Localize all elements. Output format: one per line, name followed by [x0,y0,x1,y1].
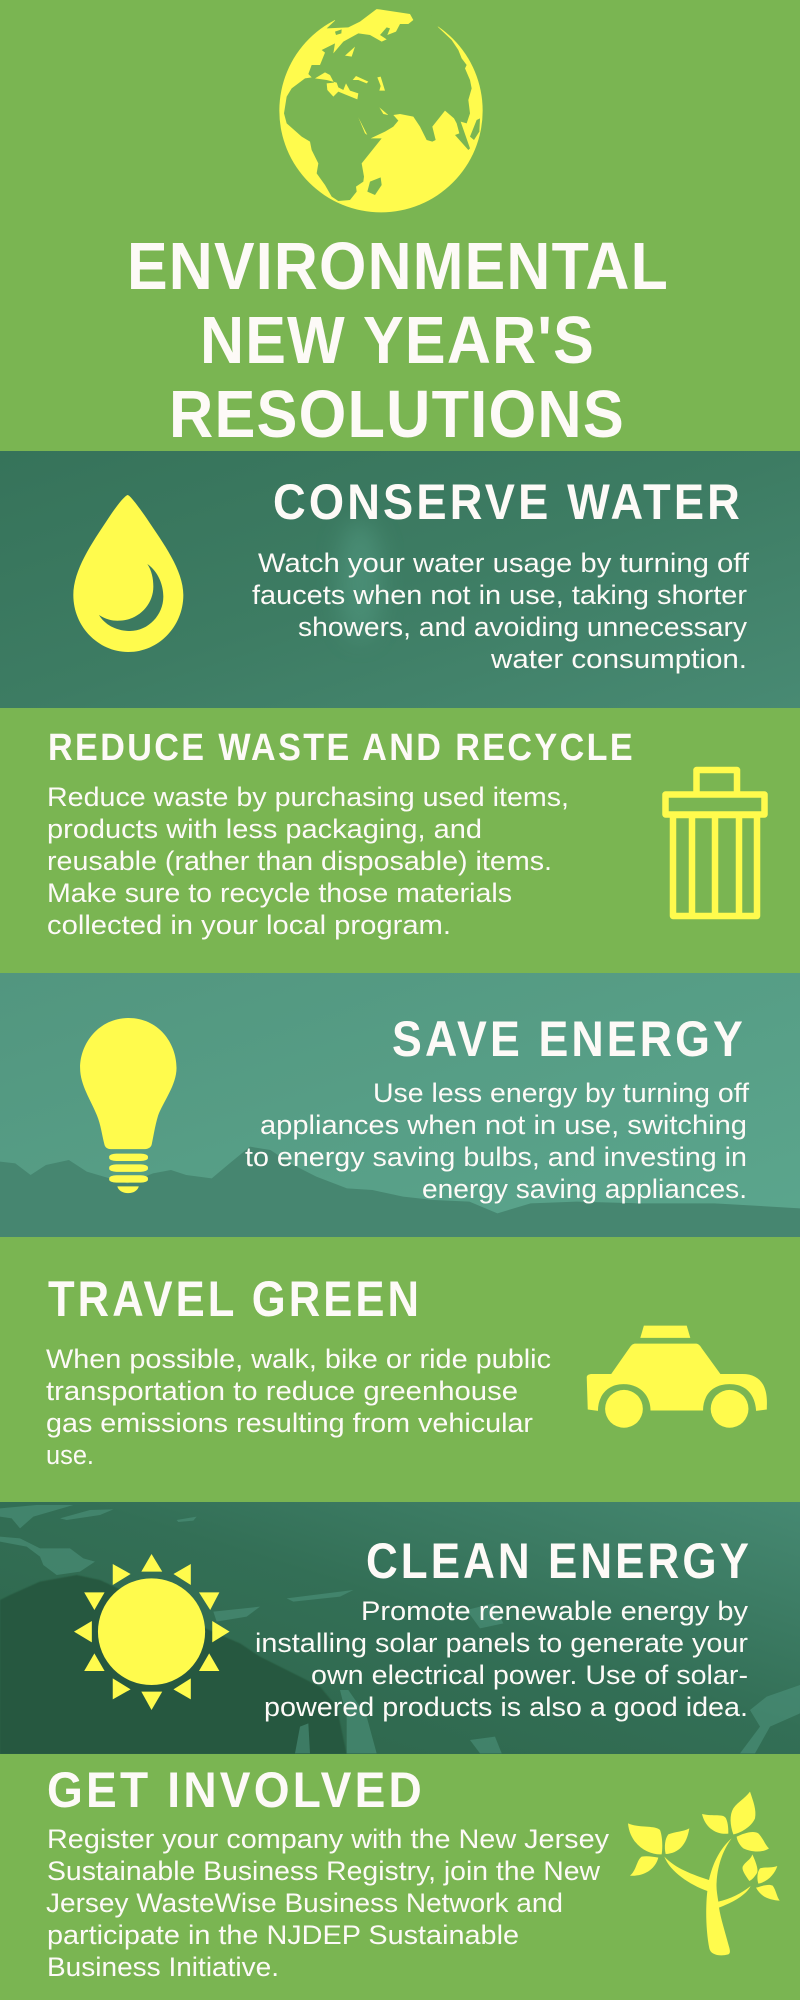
body text: own electrical power. Use of solar- [311,1660,748,1690]
body text: installing solar panels to generate your [255,1628,748,1658]
icon: sun [74,1554,230,1710]
body text: products with less packaging, and [47,814,482,844]
heading: CONSERVE WATER [273,474,743,530]
body text [252,548,750,674]
heading: SAVE ENERGY [392,1011,746,1067]
title: ENVIRONMENTAL [127,229,669,304]
band background [0,451,800,708]
band background [0,1502,800,1754]
panel: conserve water [0,451,800,708]
icon: light bulb [80,1018,177,1193]
body text: When possible, walk, bike or ride public [46,1344,551,1374]
body text: Use less energy by turning off [373,1078,750,1108]
title [127,229,669,452]
body text: water consumption. [490,644,747,674]
body text: powered products is also a good idea. [264,1692,748,1722]
body text: Sustainable Business Registry, join the New [47,1856,601,1886]
body text: transportation to reduce greenhouse [46,1376,518,1406]
panel: header [127,3,669,452]
body text: Jersey WasteWise Business Network and [46,1888,563,1918]
body text: Make sure to recycle those materials [47,878,512,908]
body text: to energy saving bulbs, and investing in [245,1142,747,1172]
panel: save energy [0,973,800,1237]
band background [0,1237,800,1502]
heading: GET INVOLVED [47,1762,425,1818]
icon: trash can [666,770,764,916]
body text: use. [46,1440,94,1470]
panel: get involved [0,1754,800,2000]
band background [0,973,800,1237]
body text: Register your company with the New Jersey [47,1824,610,1854]
heading: REDUCE WASTE AND RECYCLE [48,727,635,769]
title: NEW YEAR'S [200,303,595,378]
heading: CLEAN ENERGY [366,1533,752,1589]
body text: reusable (rather than disposable) items. [47,846,552,876]
body text [245,1078,750,1204]
body text: gas emissions resulting from vehicular [46,1408,533,1438]
body text: Watch your water usage by turning off [258,548,750,578]
heading: TRAVEL GREEN [48,1271,422,1327]
band background [0,708,800,973]
body text: showers, and avoiding unnecessary [298,612,748,642]
panel: clean energy [0,1502,800,1754]
title: RESOLUTIONS [169,377,625,452]
body text: appliances when not in use, switching [260,1110,747,1140]
icon: water drop [73,495,183,652]
icon: globe [279,3,483,212]
body text [46,1824,610,1982]
body text: Business Initiative. [47,1952,279,1982]
body text: Reduce waste by purchasing used items, [47,782,569,812]
icon: tree [628,1792,780,1955]
panel: reduce waste and recycle [0,708,800,973]
body text [47,782,569,940]
icon: taxi [587,1326,767,1428]
body text: participate in the NJDEP Sustainable [47,1920,519,1950]
body text: Promote renewable energy by [361,1596,749,1626]
body text: collected in your local program. [47,910,451,940]
body text: faucets when not in use, taking shorter [252,580,747,610]
panel: travel green [0,1237,800,1502]
band background [0,1754,800,2000]
body text: energy saving appliances. [422,1174,747,1204]
body text [46,1344,551,1470]
body text [255,1596,749,1722]
